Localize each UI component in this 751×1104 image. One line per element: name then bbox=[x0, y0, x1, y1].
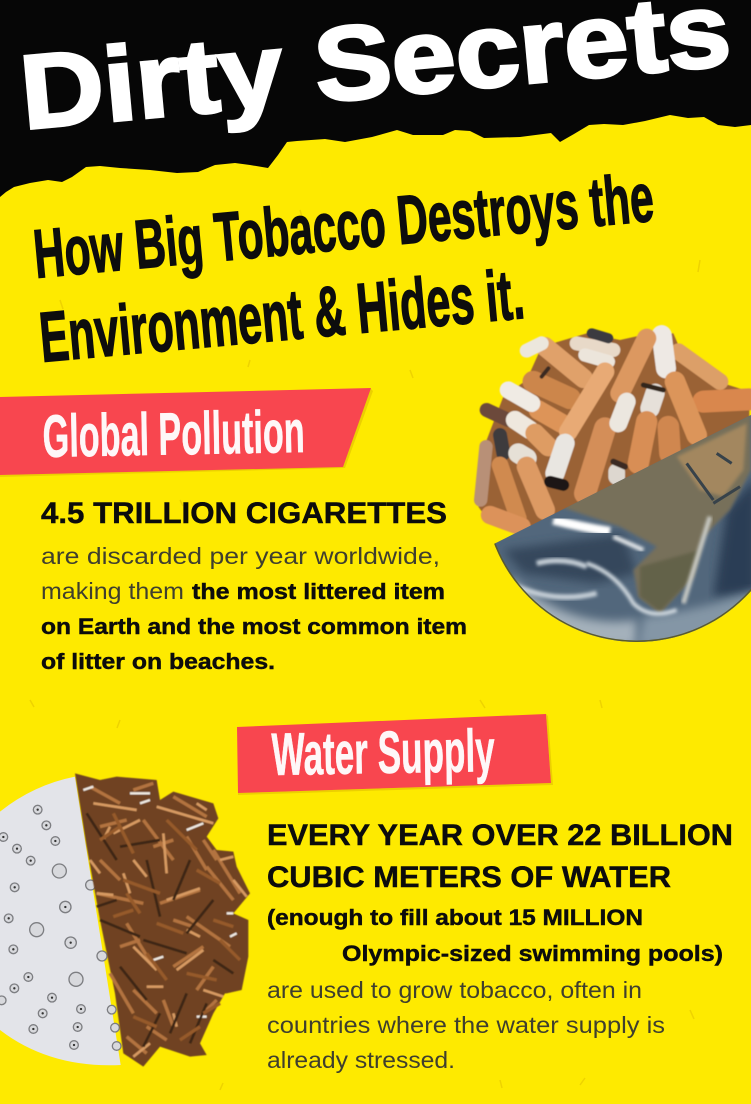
shredded tobacco bbox=[75, 773, 250, 1067]
text block: global pollution: on Earth and the most common item bbox=[41, 614, 467, 639]
text block: global pollution: 4.5 TRILLION CIGARETTES bbox=[41, 497, 447, 530]
text block: water supply: countries where the water supply is bbox=[267, 1012, 665, 1038]
text block: water supply bbox=[267, 819, 733, 1073]
image: shower head and tobacco bbox=[0, 773, 250, 1067]
subtitle bbox=[30, 159, 657, 378]
text block: global pollution: the most littered item bbox=[192, 579, 445, 604]
banner: Water Supply bbox=[237, 714, 553, 795]
text block: global pollution: are discarded per year worldwide, bbox=[41, 543, 440, 569]
banner: Global Pollution: Global Pollution bbox=[42, 398, 305, 470]
text block: global pollution: of litter on beaches. bbox=[41, 649, 275, 674]
text block: water supply: Olympic-sized swimming pools) bbox=[342, 941, 723, 966]
text block: water supply: EVERY YEAR OVER 22 BILLION bbox=[267, 819, 733, 852]
banner: Water Supply: Water Supply bbox=[271, 717, 496, 788]
banner: Global Pollution bbox=[0, 388, 373, 477]
text block: global pollution bbox=[41, 497, 467, 674]
header: black torn band bbox=[0, 0, 751, 197]
text block: water supply: (enough to fill about 15 MILLION bbox=[267, 905, 643, 930]
text block: water supply: CUBIC METERS OF WATER bbox=[267, 861, 671, 894]
text block: water supply: already stressed. bbox=[267, 1047, 455, 1073]
text block: global pollution: making them bbox=[41, 578, 184, 604]
text block: water supply: are used to grow tobacco, often in bbox=[267, 977, 642, 1003]
earth half sphere bbox=[494, 415, 751, 642]
image: cigarette butts over half globe bbox=[478, 330, 751, 647]
cigarette pile bbox=[478, 333, 749, 530]
shower head disc bbox=[0, 777, 121, 1065]
